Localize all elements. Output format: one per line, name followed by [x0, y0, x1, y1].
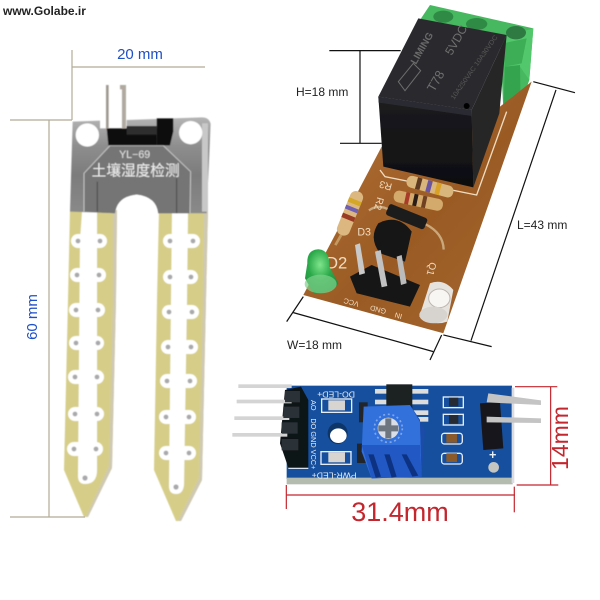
relay model text: T78 [424, 68, 447, 94]
relay dimension lines [287, 51, 575, 360]
moisture comparator module [232, 384, 541, 484]
silkscreen labels: D3 [357, 226, 371, 238]
label: probe width: 20 mm [117, 46, 163, 63]
module board [287, 386, 514, 484]
probe right leg [154, 210, 208, 521]
module silkscreen text: DO-LED+ [317, 390, 355, 400]
probe model label: YL−69 [119, 149, 150, 161]
watermark title: www.Golabe.ir [2, 4, 86, 18]
label: relay height: H=18 mm [296, 85, 348, 99]
4-pin header [232, 384, 308, 468]
smd components [357, 397, 463, 464]
resistor R1 [393, 190, 444, 212]
module dimension lines [286, 387, 558, 512]
module silkscreen text: DO GND VCC+ [309, 418, 318, 469]
relay brand text: LIMING [409, 31, 436, 66]
green LED [305, 249, 338, 293]
label: relay width: W=18 mm [287, 338, 342, 352]
probe left leg [64, 210, 117, 517]
blue potentiometer [362, 405, 425, 478]
relay rating text: 10A250VAC 10A30VDC [450, 34, 500, 101]
silkscreen labels: GND [369, 303, 387, 316]
label: probe length: 60 mm [24, 294, 41, 340]
soil probe YL-69 [64, 85, 211, 521]
status LEDs [321, 399, 352, 464]
module silkscreen text: PWR-LED+ [312, 471, 357, 481]
op-amp chip [375, 384, 428, 422]
probe metal head [70, 85, 211, 213]
transistor [374, 220, 412, 262]
silkscreen labels: R3 [378, 178, 393, 192]
silkscreen labels: R2 [371, 196, 385, 211]
silkscreen labels: D2 [326, 253, 347, 272]
probe dimension lines [10, 50, 205, 517]
resistor R3 [405, 175, 455, 199]
relay voltage text: 5VDC [442, 23, 470, 57]
silkscreen labels: VCC [342, 296, 360, 309]
resistor R2 [331, 189, 365, 248]
module silkscreen text: AO [309, 400, 318, 411]
2-pin header [480, 393, 541, 450]
label: relay length: L=43 mm [517, 218, 567, 232]
diode [366, 197, 452, 250]
relay body [378, 18, 507, 187]
silkscreen labels: IN [394, 310, 403, 321]
clear LED [419, 282, 453, 323]
relay module [303, 5, 533, 333]
pin header [350, 243, 420, 307]
silkscreen labels [326, 178, 438, 321]
silkscreen labels: Q1 [424, 261, 438, 277]
green screw terminal [420, 5, 533, 109]
module silkscreen text: + [489, 448, 496, 462]
module silkscreen text [309, 390, 496, 481]
label: module height: 14mm [547, 406, 573, 470]
probe Chinese label: 土壤湿度检测 [92, 161, 180, 179]
relay PCB [303, 82, 532, 333]
label: module width: 31.4mm [351, 497, 449, 527]
